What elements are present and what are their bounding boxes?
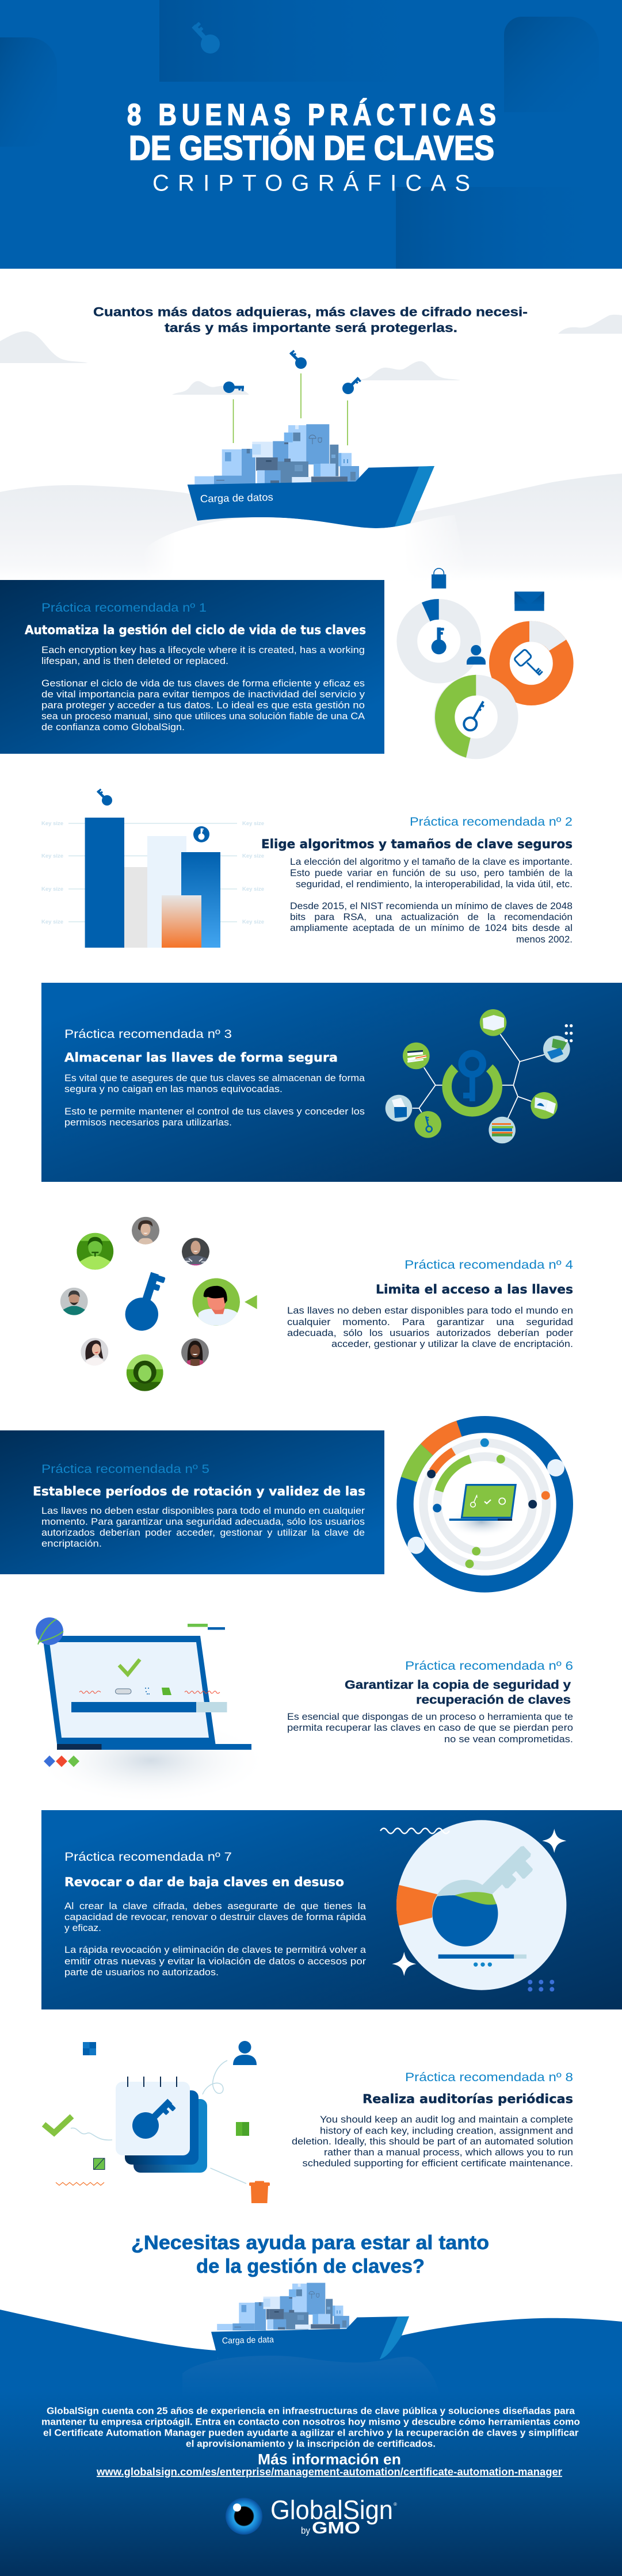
- text: practice 6: [287, 1659, 573, 1745]
- squares: [83, 2042, 249, 2169]
- icon: padlock: [432, 568, 446, 589]
- axis labels: [41, 820, 264, 925]
- white foreground hill: [143, 515, 468, 580]
- header banner: [0, 0, 622, 269]
- donut: orange: [499, 621, 566, 695]
- title: CRIPTOGRÁFICAS: [152, 170, 470, 196]
- bar chart: [41, 787, 264, 948]
- icon: notebook key: [127, 2092, 180, 2144]
- footer text: [41, 2406, 580, 2478]
- GlobalSign logo: by: [301, 2525, 310, 2536]
- practice 6 heading: [345, 1678, 571, 1707]
- practice 5 body: [41, 1506, 365, 1549]
- footer text: mantener tu empresa criptoágil. Entra en contacto con nosotros hoy mismo y descubre cómo herramientas como: [41, 2417, 580, 2427]
- practice 6 heading: recuperación de claves: [416, 1693, 571, 1707]
- photo: green man: [77, 1233, 113, 1270]
- practice 2 body: La elección del algoritmo y el tamaño de la clave es importante.: [290, 857, 573, 867]
- practice 4 body: [287, 1306, 574, 1349]
- footer ship label: Carga de data: [222, 2335, 274, 2346]
- key shape: [432, 1846, 533, 1947]
- practice 7 label: Práctica recomendada nº 7: [64, 1850, 232, 1864]
- photo: green woman: [127, 1354, 163, 1391]
- text: practice 4: [287, 1258, 574, 1349]
- node: key: [414, 1111, 441, 1138]
- closing heading: ¿Necesitas ayuda para estar al tanto: [131, 2232, 489, 2254]
- audit notebook illustration: [44, 2041, 270, 2203]
- icon: check mark: [44, 2116, 72, 2133]
- practice 3 label: Práctica recomendada nº 3: [64, 1028, 232, 1041]
- practice 3 body: Esto te permite mantener el control de tus claves y conceder los: [64, 1106, 365, 1117]
- top bars: [188, 1624, 225, 1629]
- avatar: highlighted user: [192, 1278, 240, 1326]
- practice 7 body: [64, 1901, 367, 1978]
- connector lines: [71, 2060, 246, 2184]
- donut: green: [435, 675, 508, 758]
- photo: bald man: [182, 1238, 209, 1265]
- practice 2 body: [290, 857, 573, 945]
- icon: user: [467, 645, 486, 665]
- practice 2 body: ampliamente aceptada de un mínimo de 1024 bits desde al: [290, 923, 573, 933]
- wave line: [380, 1829, 449, 1833]
- rotation ring illustration: [401, 1421, 564, 1584]
- node: books: [403, 1043, 430, 1069]
- practice 3 body: Es vital que te asegures de que tus claves se almacenan de forma: [64, 1073, 365, 1083]
- practice 3 heading: Almacenar las llaves de forma segura: [64, 1051, 338, 1064]
- donut charts illustration: [407, 568, 566, 758]
- decorative dots: [528, 1980, 554, 1991]
- practice 7 body: y eficaz.: [64, 1923, 101, 1933]
- key network illustration: [386, 1009, 573, 1143]
- icon: central key: [121, 1268, 170, 1335]
- practice 1 body: para proteger y acceder a tus datos. Lo ideal es que esta gestión no: [41, 700, 365, 711]
- practice 1 label: Práctica recomendada nº 1: [41, 601, 207, 615]
- footer text: el aprovisionamiento y la inscripción de certificados.: [186, 2438, 436, 2449]
- text: practice 2: [261, 815, 573, 945]
- practice 4 label: Práctica recomendada nº 4: [405, 1258, 573, 1272]
- photo: woman top: [132, 1217, 159, 1245]
- zigzag: [56, 2182, 104, 2185]
- people around key illustration: [60, 1217, 257, 1391]
- text: practice 8: [292, 2071, 573, 2169]
- intro text: Cuantos más datos adquieras, más claves de cifrado necesi-: [93, 305, 528, 319]
- GlobalSign logo: GlobalSign: [270, 2495, 393, 2525]
- photo: woman right: [181, 1338, 209, 1366]
- practice 2 label: Práctica recomendada nº 2: [410, 815, 573, 829]
- node: photos: [531, 1092, 558, 1119]
- axis labels: Key size: [41, 886, 63, 892]
- sparkles: [392, 1829, 566, 1976]
- practice 1 body: [41, 645, 365, 732]
- title: 8 BUENAS PRÁCTICAS: [127, 98, 496, 132]
- node: envelopes: [543, 1036, 570, 1063]
- practice 8 body: You should keep an audit log and maintain a complete: [320, 2115, 573, 2125]
- practice 2 body: Esto puede variar en función de su uso, pero también de la: [290, 868, 573, 879]
- practice 8 body: deletion. Ideally, this should be part of an automated solution: [292, 2136, 573, 2147]
- title: DE GESTIÓN DE CLAVES: [129, 129, 494, 167]
- keys above ship: [223, 349, 362, 445]
- practice 7 body: capacidad de revocar, renovar o destruir claves de forma rápida: [64, 1912, 367, 1922]
- practice 5 label: Práctica recomendada nº 5: [41, 1463, 209, 1476]
- closing heading: de la gestión de claves?: [196, 2256, 425, 2277]
- practice 5 body: encriptación.: [41, 1539, 102, 1549]
- diamonds: [44, 1756, 79, 1767]
- icon: key over bar: [94, 787, 115, 808]
- panel: practice 7: [41, 1810, 622, 2009]
- photo: woman left: [81, 1338, 108, 1365]
- practice 6 heading: Garantizar la copia de seguridad y: [345, 1678, 571, 1692]
- icon: envelope: [514, 591, 544, 611]
- axis labels: Key size: [41, 820, 63, 827]
- donut: grey: [407, 599, 471, 673]
- node: folder: [386, 1095, 412, 1121]
- practice 1 heading: Automatiza la gestión del ciclo de vida de tus claves: [25, 623, 366, 637]
- icon: eye: [226, 2498, 262, 2535]
- practice 8 body: history of each key, including creation, assignment and: [320, 2125, 573, 2136]
- progress bar: [438, 1955, 526, 1959]
- decorative dots: [565, 1024, 573, 1042]
- practice 2 body: bits para RSA, una actualización de la recomendación: [290, 912, 573, 922]
- screen details: [79, 1688, 220, 1695]
- practice 6 body: [287, 1712, 573, 1745]
- icon: check mark: [119, 1659, 140, 1674]
- axis labels: Key size: [242, 820, 264, 827]
- icon: pointer triangle: [245, 1295, 257, 1309]
- backup laptop illustration: [33, 1617, 269, 1804]
- more info heading: Más información en: [258, 2451, 401, 2468]
- practice 6 body: permita recuperar las claves en caso de que se pierdan pero: [287, 1723, 573, 1733]
- practice 7 body: emitir otras nuevas y evitar la violación de datos o accesos por: [64, 1956, 367, 1967]
- key ring: [447, 1054, 498, 1112]
- practice 7 body: parte de usuarios no autorizados.: [64, 1967, 219, 1978]
- practice 8 body: [292, 2115, 573, 2169]
- icon: key badge: [193, 826, 209, 842]
- practice 1 body: de confianza como GlobalSign.: [41, 722, 185, 732]
- practice 2 body: Desde 2015, el NIST recomienda un mínimo de claves de 2048: [290, 901, 573, 911]
- practice 1 body: lifespan, and is then deleted or replaced.: [41, 656, 228, 666]
- grey hills: [0, 474, 622, 581]
- GlobalSign logo: ®: [394, 2502, 397, 2507]
- practice 1 body: Gestionar el ciclo de vida de tus claves de forma eficiente y eficaz es: [41, 678, 365, 689]
- practice 8 label: Práctica recomendada nº 8: [405, 2071, 573, 2084]
- node: paper stack: [480, 1009, 506, 1036]
- practice 2 body: menos 2002.: [516, 934, 573, 945]
- practice 7 body: La rápida revocación y eliminación de claves te permitirá volver a: [64, 1945, 367, 1955]
- axis labels: Key size: [41, 853, 63, 860]
- ship label: Carga de datos: [200, 491, 273, 505]
- ring dots: [407, 1438, 564, 1569]
- axis labels: Key size: [41, 919, 63, 925]
- practice 8 body: scheduled supporting for efficient certificate maintenance.: [303, 2158, 573, 2169]
- axis labels: Key size: [242, 886, 264, 892]
- axis labels: Key size: [242, 919, 264, 925]
- practice 4 body: adecuada, sólo los usuarios autorizados deberían poder: [287, 1328, 574, 1338]
- footer text: GlobalSign cuenta con 25 años de experiencia en infraestructuras de clave pública y soluciones diseñadas para: [47, 2406, 575, 2417]
- data cargo ship: [188, 424, 434, 528]
- icon: user: [233, 2041, 257, 2065]
- practice 7 body: Al crear la clave cifrada, debes asegurarte de que tienes la: [64, 1901, 367, 1911]
- intro text: tarás y más importante será protegerlas.: [165, 320, 457, 335]
- closing heading: [131, 2232, 489, 2277]
- practice 4 body: Las llaves no deben estar disponibles para todo el mundo en: [287, 1306, 573, 1316]
- photo: bearded man: [60, 1288, 88, 1315]
- intro text: [93, 305, 528, 335]
- icon: globe: [36, 1617, 63, 1645]
- icon: trash can: [249, 2181, 270, 2203]
- practice 1 body: sea un proceso manual, sino que utilices una solución fiable de una CA: [41, 711, 365, 722]
- footer ship: [211, 2283, 409, 2359]
- practice 3 body: [64, 1073, 365, 1128]
- panel: practice 5: [0, 1430, 384, 1574]
- title: [127, 98, 496, 196]
- icon: faint key: [186, 20, 224, 58]
- practice 1 body: de vital importancia para evitar tiempos de inactividad del servicio y: [41, 689, 365, 700]
- practice 2 body: seguridad, el rendimiento, la interoperabilidad, la vida útil, etc.: [296, 879, 573, 890]
- practice 5 heading: Establece períodos de rotación y validez de las: [33, 1484, 365, 1498]
- GlobalSign logo: [226, 2495, 397, 2537]
- node: binders: [489, 1117, 516, 1143]
- practice 1 body: Each encryption key has a lifecycle where it is created, has a working: [41, 645, 365, 655]
- practice 5 body: autorizados deberían poder acceder, gestionar y utilizar la clave de: [41, 1528, 365, 1538]
- practice 6 body: Es esencial que dispongas de un proceso o herramienta que te: [287, 1712, 573, 1722]
- practice 4 body: cualquier momento. Para garantizar una seguridad: [287, 1317, 573, 1327]
- practice 3 body: permisos necesarios para utilizarlas.: [64, 1117, 232, 1128]
- practice 4 heading: Limita el acceso a las llaves: [376, 1283, 573, 1296]
- practice 6 body: no se vean comprometidas.: [444, 1734, 573, 1745]
- practice 5 body: momento. Para garantizar una seguridad adecuada, sólo los usuarios: [41, 1517, 365, 1527]
- axis labels: Key size: [242, 853, 264, 860]
- practice 8 body: rather than a manual process, which allows you to run: [324, 2147, 573, 2158]
- practice 4 body: acceder, gestionar y utilizar la clave de encriptación.: [331, 1339, 573, 1349]
- practice 2 heading: Elige algoritmos y tamaños de clave seguros: [261, 837, 573, 851]
- panel: practice 3: [41, 983, 622, 1182]
- practice 7 heading: Revocar o dar de baja claves en desuso: [64, 1875, 344, 1889]
- url: www.globalsign.com/es/enterprise/management-automation/certificate-automation-manager: [96, 2466, 562, 2478]
- practice 3 body: segura y no caigan en las manos equivocadas.: [64, 1084, 283, 1094]
- practice 6 label: Práctica recomendada nº 6: [405, 1659, 573, 1673]
- revoked key illustration: [380, 1820, 566, 1991]
- panel: practice 1: [0, 580, 384, 754]
- progress dots: [474, 1963, 492, 1967]
- mini laptop: [446, 1484, 517, 1537]
- footer text: el Certificate Automation Manager pueden ayudarte a agilizar el archivo y la recuperación de claves y simplificar: [43, 2428, 579, 2438]
- clouds: [0, 315, 622, 395]
- practice 8 heading: Realiza auditorías periódicas: [362, 2092, 573, 2106]
- footer wave: [0, 2310, 622, 2576]
- GlobalSign logo: GMO: [312, 2519, 360, 2537]
- practice 5 body: Las llaves no deben estar disponibles para todo el mundo en cualquier: [41, 1506, 365, 1516]
